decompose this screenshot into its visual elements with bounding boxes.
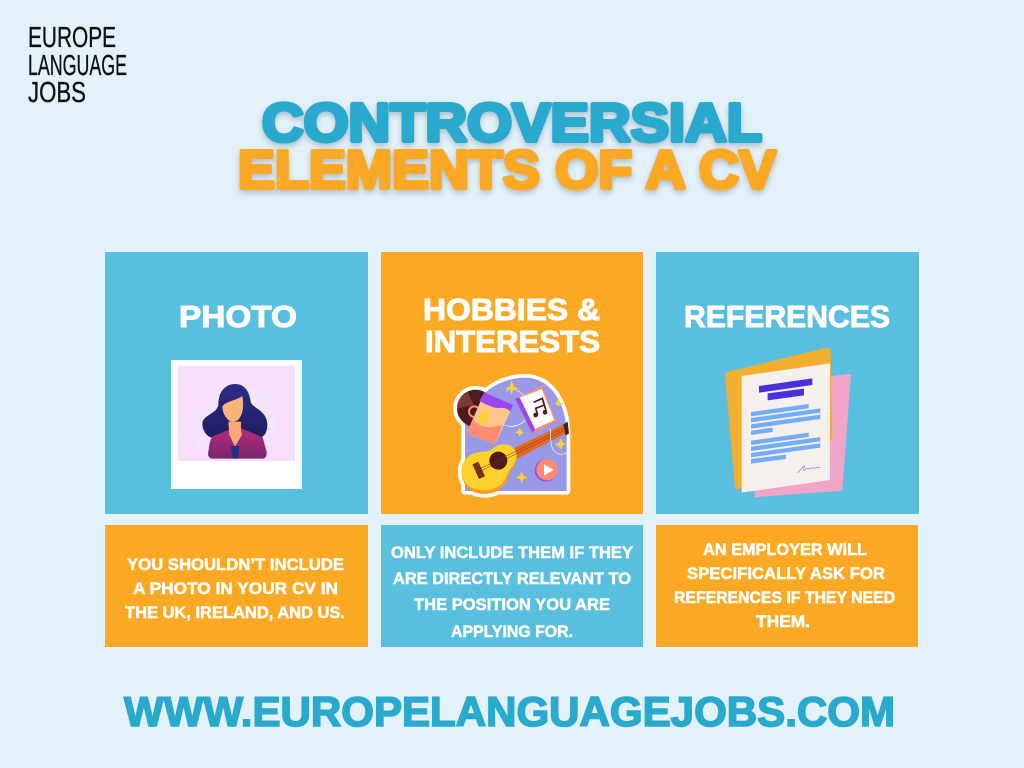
caption: photo: A PHOTO IN YOUR CV IN: [133, 580, 338, 598]
logo: Europe Language Jobs: [28, 22, 127, 109]
caption: references: REFERENCES IF THEY NEED: [674, 589, 895, 607]
caption: hobbies and interests: [381, 525, 643, 647]
heading: hobbies and interests: HOBBIES &: [423, 292, 600, 327]
caption: hobbies and interests: THE POSITION YOU ARE: [414, 596, 610, 614]
icon: music and guitar sticker: [457, 378, 569, 494]
logo: Europe Language Jobs: JOBS: [28, 77, 86, 109]
heading: references: REFERENCES: [684, 299, 890, 334]
icon: polaroid portrait: [171, 360, 302, 489]
panel: hobbies and interests: [381, 252, 643, 514]
website url: WWW.EUROPELANGUAGEJOBS.COM: [124, 688, 895, 735]
caption: references: SPECIFICALLY ASK FOR: [687, 565, 885, 583]
heading: photo: PHOTO: [179, 299, 297, 334]
heading: hobbies and interests: INTERESTS: [425, 324, 600, 359]
caption: hobbies and interests: ONLY INCLUDE THEM IF THEY: [391, 544, 633, 562]
icon: cv document stack: [725, 348, 851, 497]
heading: hobbies and interests: [423, 292, 600, 359]
caption: photo: [105, 525, 368, 647]
sticker white outline: [457, 378, 567, 494]
caption: hobbies and interests: APPLYING FOR.: [451, 623, 573, 641]
caption: references: [656, 525, 918, 647]
caption: references: AN EMPLOYER WILL: [703, 541, 867, 559]
title: ELEMENTS OF A CV: [238, 140, 776, 200]
caption: references: THEM.: [756, 613, 810, 631]
panel: references: [656, 252, 919, 514]
caption: photo: THE UK, IRELAND, AND US.: [125, 604, 345, 622]
panel: photo: [105, 252, 368, 514]
signature: [798, 466, 820, 473]
logo: Europe Language Jobs: LANGUAGE: [28, 50, 127, 82]
caption: hobbies and interests: ARE DIRECTLY RELEVANT TO: [393, 570, 631, 588]
title: [238, 93, 776, 200]
caption: photo: YOU SHOULDN’T INCLUDE: [127, 556, 344, 574]
logo: Europe Language Jobs: EUROPE: [28, 22, 116, 54]
title: CONTROVERSIAL: [262, 93, 762, 153]
